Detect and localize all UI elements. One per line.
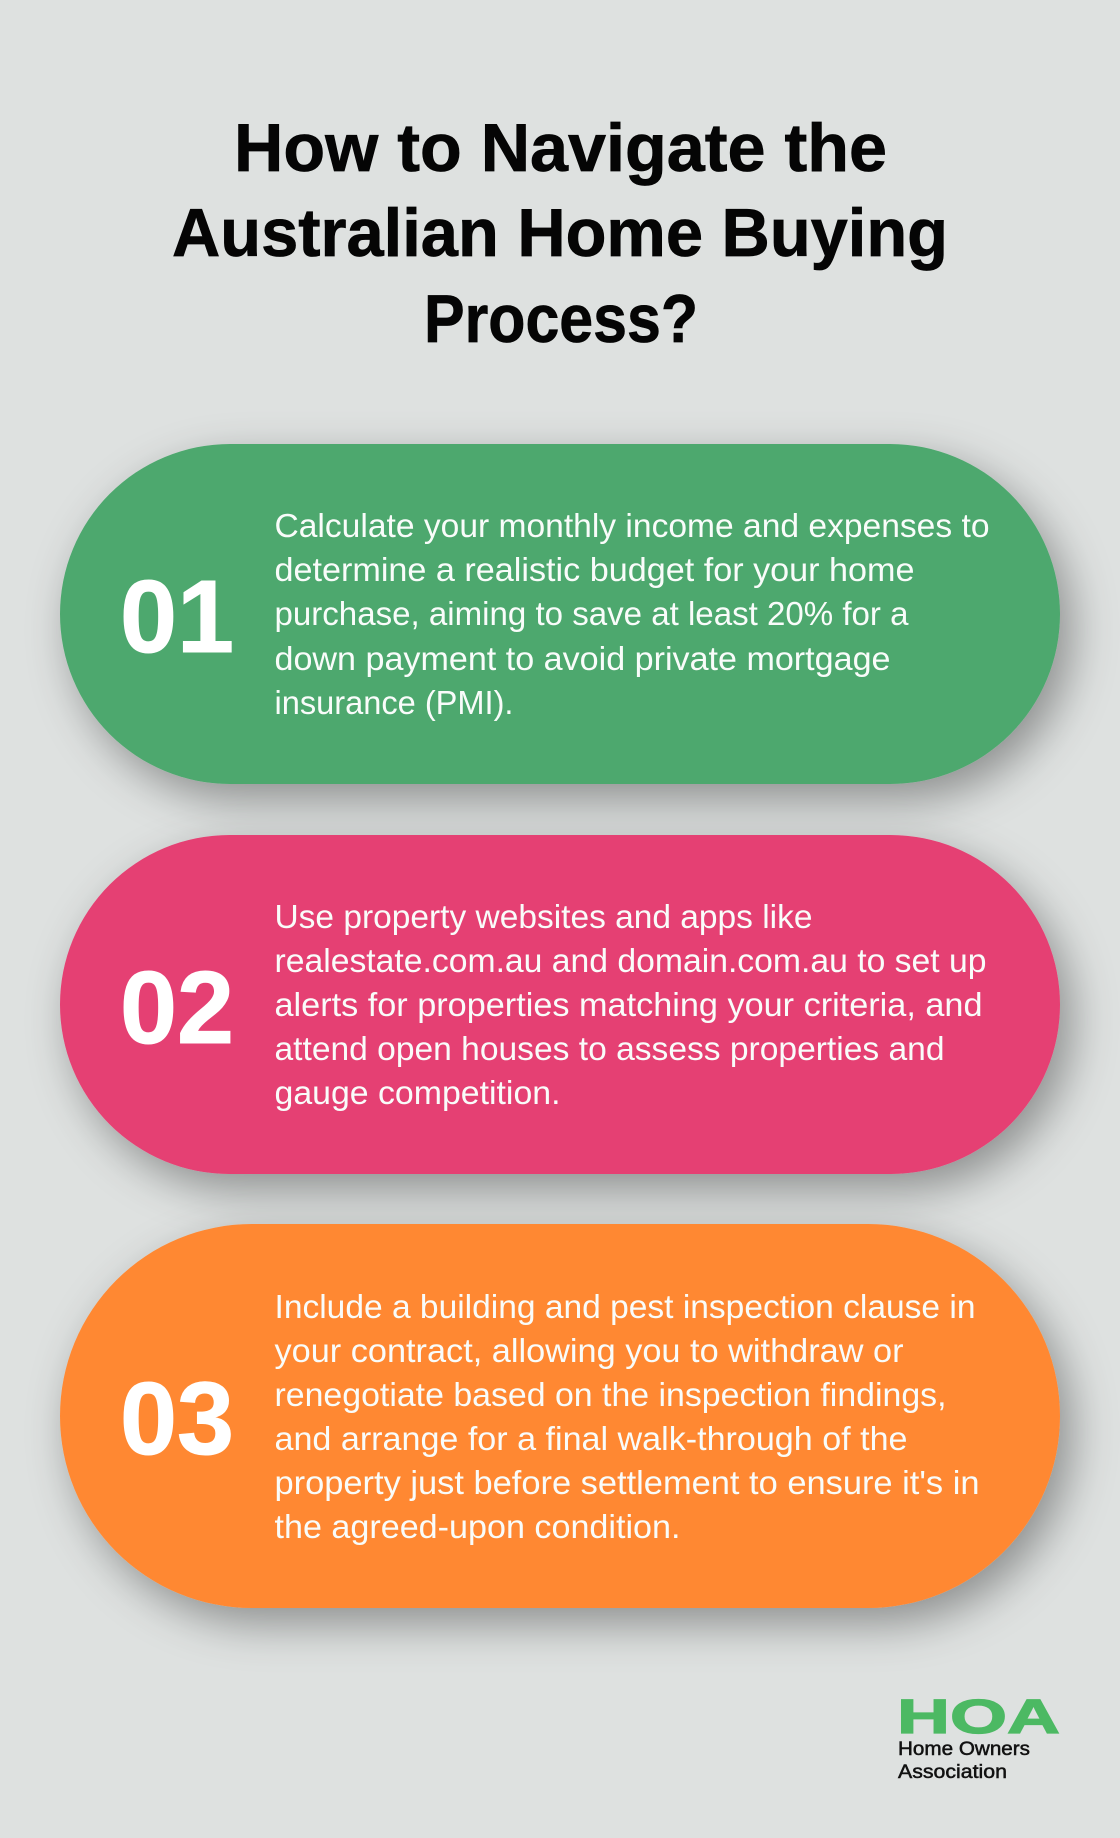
step 01 text: Calculate your monthly income and expenses to <box>274 508 990 545</box>
step 02 text: Use property websites and apps like <box>274 899 812 936</box>
step 02 text: alerts for properties matching your criteria, and <box>274 987 982 1024</box>
step 01 text <box>274 508 990 722</box>
logo: HOA Home Owners Association: Home Owners <box>898 1739 1030 1760</box>
pill background pink <box>60 835 1060 1174</box>
step 02 text: gauge competition. <box>274 1075 560 1112</box>
panel: step 01 <box>60 444 1060 784</box>
step 01 text: insurance (PMI). <box>274 685 514 722</box>
step 03 text: property just before settlement to ensure it's in <box>274 1465 980 1502</box>
title: How to Navigate the <box>234 110 887 186</box>
step 03 text: and arrange for a final walk-through of the <box>274 1421 908 1458</box>
step 03 text: Include a building and pest inspection clause in <box>274 1289 976 1326</box>
step 03 text: the agreed-upon condition. <box>274 1509 680 1546</box>
logo: HOA Home Owners Association <box>897 1691 1060 1783</box>
step 01 text: purchase, aiming to save at least 20% for a <box>274 596 909 633</box>
pill background green <box>60 444 1060 784</box>
number 02: 02 <box>120 950 234 1065</box>
step 03 text: your contract, allowing you to withdraw or <box>274 1333 904 1370</box>
step 02 text: realestate.com.au and domain.com.au to set up <box>274 943 986 980</box>
title <box>172 110 948 357</box>
logo: HOA Home Owners Association: Association <box>898 1762 1007 1783</box>
step 03 text <box>274 1289 980 1546</box>
step 02 text <box>274 899 986 1112</box>
pill background orange <box>60 1224 1060 1608</box>
number 01: 01 <box>120 559 234 674</box>
panel: step 03 <box>60 1224 1060 1608</box>
logo: HOA Home Owners Association: HOA <box>897 1691 1060 1744</box>
title: Process? <box>424 281 698 357</box>
title: Australian Home Buying <box>172 195 948 271</box>
step 02 text: attend open houses to assess properties and <box>274 1031 944 1068</box>
panel: step 02 <box>60 835 1060 1174</box>
step 03 text: renegotiate based on the inspection findings, <box>274 1377 946 1414</box>
step 01 text: determine a realistic budget for your home <box>274 552 914 589</box>
number 03: 03 <box>120 1361 234 1476</box>
step 01 text: down payment to avoid private mortgage <box>274 641 890 678</box>
